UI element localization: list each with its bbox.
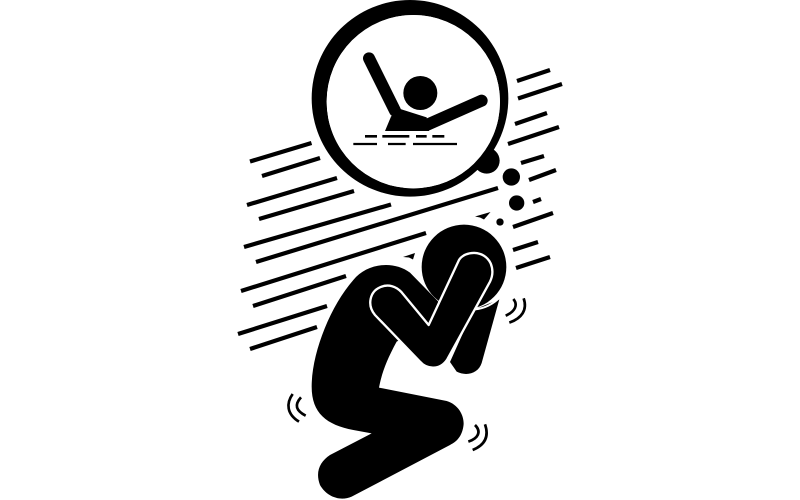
body and legs (312, 265, 464, 499)
head (422, 225, 506, 309)
small thought circles (474, 148, 524, 226)
swimmer arms (369, 58, 482, 125)
water dashes (365, 132, 444, 140)
swimmer head (403, 76, 437, 110)
front arm covering head (370, 253, 492, 368)
rear arm (450, 299, 499, 374)
diagonal background lines (238, 70, 562, 349)
trembling marks (288, 298, 525, 450)
bubble interior (327, 15, 500, 188)
white arc under head (475, 297, 501, 309)
crouching person (288, 225, 525, 499)
bubble ring (312, 0, 508, 197)
swimmer body (385, 108, 429, 131)
thought bubble (312, 0, 524, 226)
swimmer drowning (353, 58, 482, 144)
